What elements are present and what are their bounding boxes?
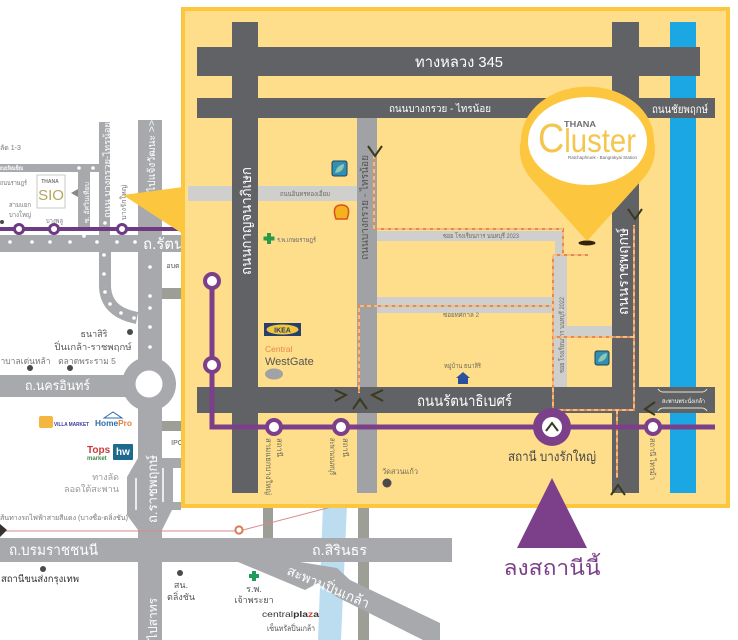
- place labels: ทางลัด: [92, 472, 119, 482]
- soi labels: ร.พ.เกษมราษฎร์: [277, 236, 316, 244]
- panel: zoomed map: ถนนบางกรวย - ไทรน้อย: [359, 155, 371, 260]
- left context map: [0, 120, 452, 640]
- purple line left: [0, 227, 181, 231]
- place labels: [0, 263, 315, 633]
- pin shadow: [578, 240, 596, 246]
- left context map: ถ.บรมราชชนนี: [9, 542, 98, 559]
- central westgate: Central: [265, 344, 293, 354]
- THANA SIO sign: SIO: [38, 187, 64, 204]
- labels left top: ถนนรัตนเขียน: [0, 164, 24, 172]
- hw logo: [113, 444, 133, 460]
- road direction marks: [8, 166, 152, 349]
- hw logo: hw: [116, 447, 130, 458]
- central westgate: [265, 344, 314, 380]
- yellow pointer triangle: [123, 187, 183, 234]
- place labels: IPC: [171, 440, 183, 447]
- left context map: สะพานปิ่นเกล้า: [285, 561, 372, 611]
- purple line: [212, 281, 715, 427]
- place labels: ส้นทางรถไฟฟ้าสายสีแดง (บางซื่อ-ตลิ่งชัน): [0, 513, 128, 522]
- left top road labels: ไปแจ้งวัฒนะ >>: [146, 120, 158, 193]
- grey road network: [0, 120, 452, 640]
- road labels: ทางหลวง 345: [415, 54, 503, 71]
- red line station: [235, 526, 243, 534]
- left top road labels: [83, 120, 158, 223]
- place labels: ธนาสิริ: [80, 329, 108, 339]
- station labels: [264, 438, 657, 495]
- place dots: [0, 220, 183, 576]
- icon: bangchak: [332, 161, 347, 176]
- labels left top: บางพลู: [46, 218, 63, 225]
- left context map: ถ.นครอินทร์: [25, 378, 90, 393]
- soi labels: หมู่บ้าน ธนาสิริ: [444, 362, 481, 370]
- wat label: วัดสวนแก้ว: [382, 467, 418, 476]
- caption: ลงสถานีนี้: [504, 553, 601, 580]
- left top road labels: ซ. อัศวินเทียบ: [83, 182, 91, 223]
- icon: hospital cross: [264, 233, 274, 244]
- station labels: สะพานนนทบุรี: [328, 438, 337, 475]
- homepro logo: [95, 412, 132, 428]
- road names: ถ.รัตน: [143, 236, 184, 253]
- labels left top: สามแยก: [9, 202, 31, 209]
- labels left top: ลัด 1-3: [0, 144, 21, 152]
- icon: shell: [334, 205, 349, 219]
- logo: Cluster: [538, 115, 636, 161]
- central westgate: WestGate: [265, 356, 314, 368]
- bridge marks: [658, 389, 707, 411]
- dark roads: [197, 22, 715, 493]
- panel: zoomed map: [183, 9, 728, 506]
- place labels: ปิ่นเกล้า-ราชพฤกษ์: [54, 340, 132, 352]
- panel: zoomed map: ถนนราชพฤกษ์: [615, 228, 631, 315]
- THANA SIO sign: THANA: [41, 179, 59, 185]
- THANA SIO sign: [37, 175, 65, 208]
- tops logo: [87, 445, 111, 462]
- arrow to sign: [71, 189, 78, 197]
- pin window: [528, 97, 647, 185]
- location pin: [520, 87, 655, 246]
- left top road labels: บางรักใหญ่: [119, 185, 128, 220]
- minor roads bottom: [162, 288, 369, 640]
- station name: สถานี บางรักใหญ่: [508, 449, 596, 464]
- icon: IKEA: [264, 323, 301, 336]
- logo: Ratchaphruek - Bangrakyai Station: [568, 155, 637, 160]
- place labels: เซ็นทรัลปิ่นเกล้า: [267, 622, 315, 633]
- icon: IKEA: IKEA: [274, 328, 291, 334]
- hospital cross: [249, 571, 259, 581]
- icon: bangchak 2: [595, 351, 609, 365]
- central plaza logo: central pla za: [262, 609, 319, 619]
- place labels: สถานีขนส่งกรุงเทพ: [1, 573, 79, 585]
- train head: [0, 524, 7, 537]
- dashed access route: [359, 155, 634, 478]
- place labels: ตลิ่งชัน: [167, 590, 195, 602]
- soi labels: ซอย โรงเรียนการ นนทบุรี 2023: [443, 232, 519, 240]
- main station: Bang Rak Yai: [533, 408, 571, 446]
- roundabout centre: [136, 370, 162, 398]
- homepro logo: HomePro: [95, 419, 132, 428]
- soi labels: ซอย โรงเรียนการ นนทบุรี 2022: [558, 297, 566, 373]
- place labels: ลอดใต้สะพาน: [64, 484, 119, 494]
- left context map: ไปสาทร: [146, 597, 160, 640]
- place labels: สน.: [174, 580, 188, 590]
- pin body: [520, 87, 655, 241]
- river: [318, 505, 347, 640]
- curved slip road: [105, 252, 137, 318]
- place labels: เจ้าพระยา: [234, 595, 274, 605]
- villa market logo: [39, 416, 90, 428]
- place labels: อบต: [166, 263, 180, 270]
- soi labels: ซอยทศกาล 2: [443, 312, 479, 319]
- villa market logo: VILLA MARKET: [54, 422, 90, 428]
- labels left top: ถนนราษฎร์: [0, 179, 27, 187]
- stations: [205, 274, 660, 434]
- grey road: [357, 118, 377, 493]
- lane slits: [136, 468, 163, 510]
- panel: zoomed map: ถนนชัยพฤกษ์: [652, 103, 708, 116]
- icon: house: [456, 372, 470, 384]
- panel: zoomed map: สะพานพระนั่งเกล้า: [662, 397, 705, 405]
- stations left: [14, 224, 126, 234]
- place labels: ตลาดพระราม 5: [58, 356, 116, 366]
- labels left top: บางใหญ่: [9, 210, 31, 219]
- light grey sois: [188, 186, 613, 387]
- left context map: ถ.ราชพฤกษ์: [145, 455, 160, 523]
- place labels: ร.พ.: [246, 584, 262, 594]
- tops logo: Tops: [87, 445, 111, 456]
- panel: zoomed map: ถนนกาญจนาภิเษก: [238, 167, 254, 275]
- station labels: สถานี: [275, 438, 284, 457]
- logo: THANA: [564, 119, 596, 129]
- station labels: สามแยกบางใหญ่: [264, 438, 273, 495]
- panel: zoomed map: ถนนรัตนาธิเบศร์: [417, 393, 512, 410]
- blue canal: [670, 22, 696, 493]
- tops logo: market: [87, 456, 107, 462]
- wat dot: [382, 478, 392, 488]
- station labels: สถานี: [341, 438, 350, 457]
- labels left top: [0, 144, 63, 225]
- soi labels: [277, 189, 566, 373]
- left top road labels: ถนน บางกรวย-ไทรน้อย: [102, 122, 112, 218]
- panel: zoomed map: ถนนบางกรวย - ไทรน้อย: [389, 103, 491, 115]
- red line: [0, 506, 335, 531]
- purple down-here pointer: [504, 478, 601, 580]
- soi labels: ถนนอินทรทองเอี่ยม: [280, 189, 330, 198]
- left context map: ถ.สิรินธร: [312, 542, 367, 558]
- chevrons: [335, 146, 655, 495]
- station labels: สถานี ไทรม้า: [648, 438, 657, 480]
